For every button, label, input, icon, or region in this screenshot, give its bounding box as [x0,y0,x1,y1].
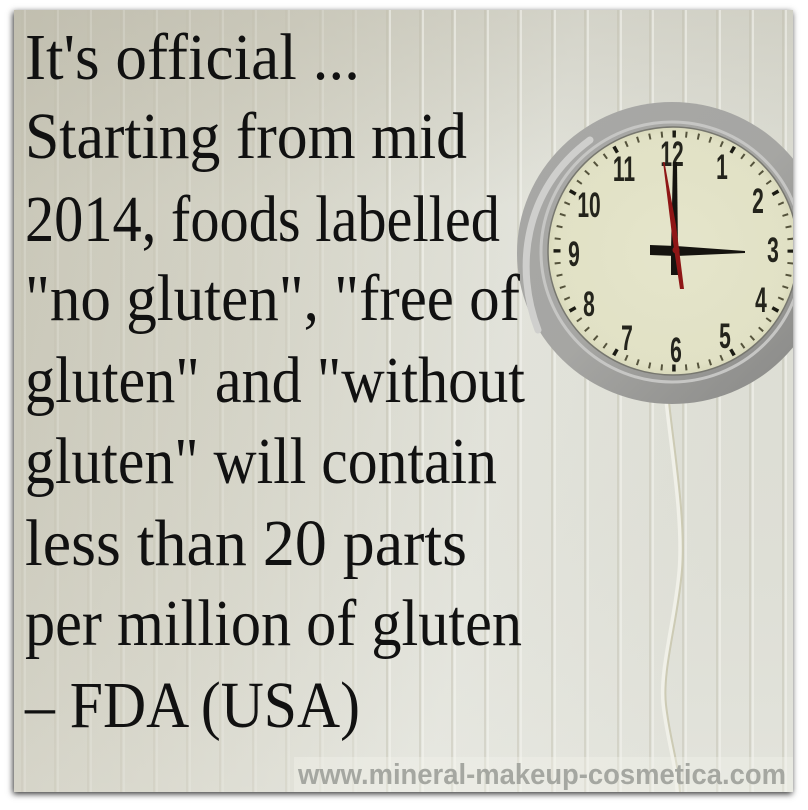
line 7: less than 20 parts [25,507,467,580]
line 6: gluten" will contain [25,425,497,498]
line 2: Starting from mid [25,100,467,173]
clock numerals: 11 [613,151,635,189]
clock numerals: 6 [670,332,682,370]
heading message [24,21,525,742]
clock numerals: 5 [719,318,731,356]
clock numerals: 7 [621,320,633,358]
clock numerals [568,136,779,370]
clock numerals: 12 [660,136,684,174]
line 8: per million of gluten [25,587,522,660]
line 1: It's official ... [25,21,360,94]
clock numerals: 3 [767,232,779,270]
clock rim [517,102,808,404]
line 3: 2014, foods labelled [25,183,500,256]
clock numerals: 2 [752,183,764,221]
clock numerals: 1 [716,149,728,187]
clock numerals: 9 [568,236,580,274]
line 5: gluten" and "without [25,344,525,417]
hour ticks [557,134,791,368]
line 4: "no gluten", "free of [25,262,520,335]
watermark band [294,757,793,792]
clock numerals: 10 [577,187,601,225]
minute ticks [557,134,791,368]
clock power cord [663,402,683,792]
clock numerals: 4 [755,282,767,320]
line 9: – FDA (USA) [24,669,360,742]
clock numerals: 8 [583,286,595,324]
icon: wall clock [517,102,808,404]
clock hands [650,162,745,289]
clock face [548,127,798,375]
